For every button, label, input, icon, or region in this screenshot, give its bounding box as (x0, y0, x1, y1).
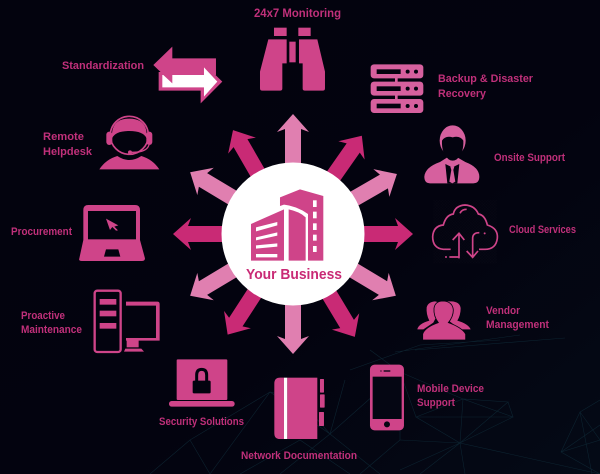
label: Proactive Maintenance: Proactive (21, 310, 65, 322)
label: Vendor Management: Vendor (486, 305, 521, 317)
panel: central circle (222, 162, 364, 306)
icon: procurement laptop (79, 205, 145, 261)
label: Proactive Maintenance: Maintenance (21, 324, 82, 336)
label: Remote Helpdesk: Helpdesk (43, 146, 93, 158)
label: 24x7 Monitoring: 24x7 Monitoring (254, 6, 341, 20)
icon: onsite support person (424, 125, 479, 183)
label: Remote Helpdesk (43, 131, 93, 158)
label: Mobile Device Support (417, 383, 484, 409)
label: Network Documentation: Network Documentation (241, 450, 357, 462)
icon: network documentation notebook (274, 378, 325, 439)
label: Remote Helpdesk: Remote (43, 131, 84, 143)
icon: mobile phone (370, 365, 404, 430)
heading: Your Business: Your Business (246, 266, 342, 283)
label: Vendor Management (486, 305, 549, 331)
label: Backup & Disaster Recovery: Recovery (438, 88, 487, 100)
icon: desktop computer tower and monitor (95, 291, 160, 352)
icon: cloud services (433, 200, 497, 263)
icon: binoculars (260, 28, 325, 91)
label: Standardization: Standardization (62, 60, 144, 72)
label: Onsite Support: Onsite Support (494, 152, 565, 164)
icon: vendor management people (417, 301, 471, 340)
label: Vendor Management: Management (486, 319, 549, 331)
background network mesh (150, 335, 600, 474)
label: Procurement: Procurement (11, 226, 72, 238)
label: Security Solutions: Security Solutions (159, 416, 244, 428)
label: Backup & Disaster Recovery (438, 73, 534, 100)
label: Backup & Disaster Recovery: Backup & Disaster (438, 73, 534, 85)
label: Mobile Device Support: Mobile Device (417, 383, 484, 395)
panel: arrow burst (173, 114, 413, 354)
label: Mobile Device Support: Support (417, 397, 455, 409)
icon: security laptop with padlock (169, 359, 235, 407)
label: Proactive Maintenance (21, 310, 82, 336)
icon: backup servers (371, 64, 423, 113)
icon: standardization arrows (153, 47, 222, 103)
icon: office building (251, 189, 323, 261)
icon: remote helpdesk headset agent (99, 116, 159, 169)
label: Cloud Services: Cloud Services (509, 224, 576, 236)
